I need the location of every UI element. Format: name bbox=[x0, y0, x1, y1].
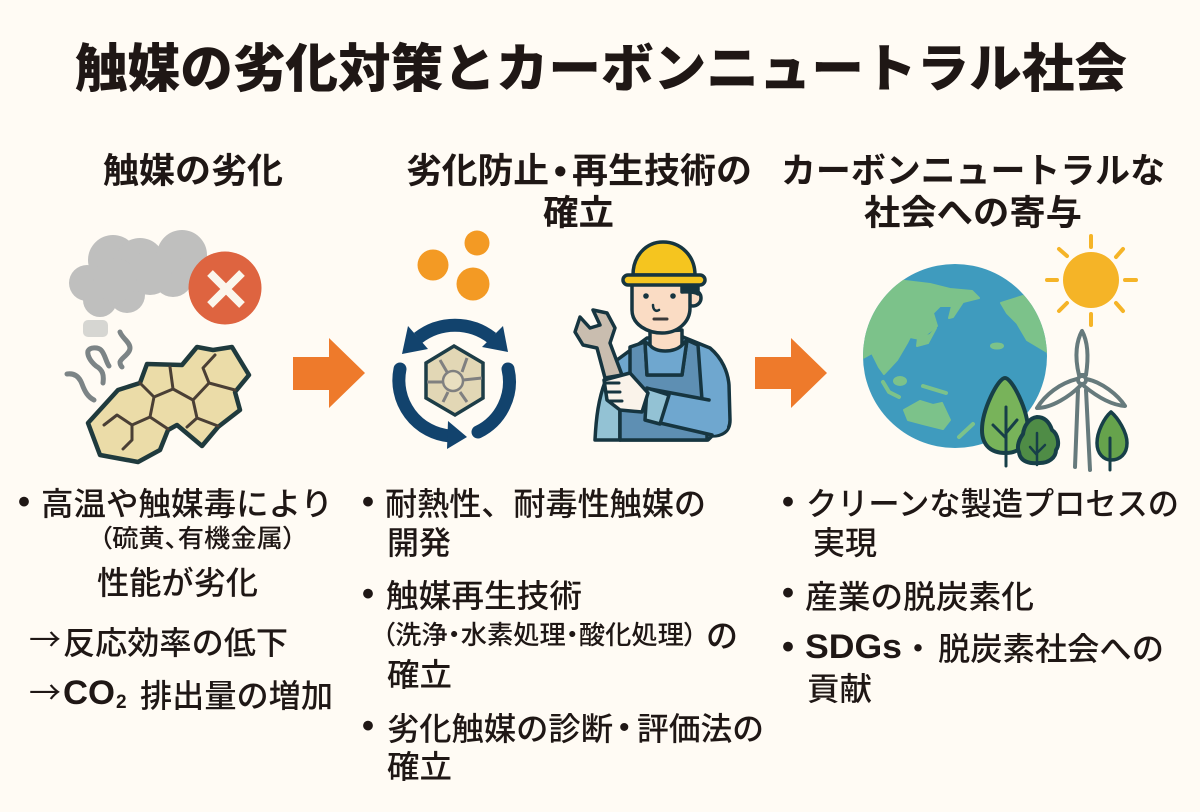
icon: globe bbox=[850, 264, 1052, 448]
icon: cracked catalyst bbox=[88, 347, 249, 462]
text block: contributions: ・ bbox=[769, 628, 807, 670]
text block: degradation causes: 排出量の増加 bbox=[140, 678, 333, 714]
heading: carbon neutral contribution: 社会への寄与 bbox=[864, 194, 1082, 233]
icon: wind turbine bbox=[1037, 331, 1125, 470]
text block: degradation causes bbox=[5, 483, 333, 714]
text block: prevention measures: の bbox=[706, 618, 738, 654]
heading: prevention and regeneration: 劣化防止 bbox=[406, 152, 549, 191]
text block: contributions: 産業の脱炭素化 bbox=[805, 579, 1034, 615]
text block: degradation causes: 高温や触媒毒により bbox=[41, 486, 333, 522]
text block: contributions bbox=[769, 483, 1179, 707]
text block: degradation causes: ・ bbox=[5, 483, 43, 525]
text block: degradation causes: CO bbox=[63, 674, 115, 712]
text block: prevention measures: 劣化触媒の診断 bbox=[387, 711, 613, 747]
text block: contributions: 脱炭素社会への bbox=[938, 631, 1164, 667]
text block: prevention measures: 触媒再生技術 bbox=[386, 578, 582, 614]
text block: prevention measures: • bbox=[619, 711, 630, 744]
icon: red cross badge bbox=[188, 252, 262, 324]
icon: worker with wrench bbox=[575, 242, 730, 440]
text block: degradation causes: 性能が劣化 bbox=[97, 565, 258, 601]
text block: prevention measures bbox=[349, 483, 764, 785]
text block: prevention measures: 評価法の bbox=[637, 711, 764, 747]
text block: contributions: 貢献 bbox=[807, 671, 872, 707]
arrow: first to second bbox=[293, 338, 365, 408]
heading: prevention and regeneration: 確立 bbox=[543, 194, 614, 233]
text block: contributions: クリーンな製造プロセスの bbox=[806, 486, 1179, 522]
text block: degradation causes: → bbox=[29, 668, 61, 714]
heading: prevention and regeneration bbox=[406, 150, 752, 233]
text block: prevention measures: ・ bbox=[349, 575, 387, 617]
icon: sun bbox=[1047, 236, 1136, 325]
icon: trees bbox=[982, 378, 1127, 470]
text block: contributions: ・ bbox=[769, 483, 807, 525]
text block: contributions: SDGs bbox=[805, 628, 902, 666]
heading: carbon neutral contribution: カーボンニュートラルな bbox=[781, 152, 1165, 191]
text block: prevention measures: 耐熱性、耐毒性触媒の bbox=[385, 486, 706, 522]
heading: catalyst degradation: 触媒の劣化 bbox=[103, 152, 283, 191]
title: 触媒の劣化対策とカーボンニュートラル社会 bbox=[75, 41, 1127, 99]
arrow: second to third bbox=[755, 338, 827, 408]
panel: prevention and regeneration bbox=[349, 150, 764, 785]
panel: catalyst degradation bbox=[5, 152, 333, 714]
text block: contributions: 実現 bbox=[813, 525, 877, 561]
heading: prevention and regeneration: • bbox=[554, 150, 567, 191]
text block: degradation causes: → bbox=[29, 615, 61, 661]
text block: contributions: ・ bbox=[902, 631, 934, 667]
text block: prevention measures: ・ bbox=[349, 707, 387, 749]
text block: prevention measures: 開発 bbox=[387, 525, 451, 561]
text block: prevention measures: ・ bbox=[349, 483, 387, 525]
icon: fumes bbox=[67, 332, 130, 400]
heading: prevention and regeneration: 再生技術の bbox=[572, 152, 752, 191]
text block: prevention measures: （洗浄・水素処理・酸化処理） bbox=[382, 620, 697, 650]
panel: carbon neutral contribution bbox=[769, 152, 1179, 707]
text block: degradation causes: 反応効率の低下 bbox=[63, 625, 288, 661]
icon: regeneration cycle bbox=[399, 325, 509, 449]
heading: carbon neutral contribution bbox=[781, 152, 1165, 233]
text block: prevention measures: 確立 bbox=[387, 657, 452, 693]
icon: smoke cloud bbox=[69, 230, 207, 337]
text block: prevention measures: 確立 bbox=[387, 749, 452, 785]
text block: degradation causes: （硫黄、有機金属） bbox=[99, 525, 296, 553]
icon: orange particles bbox=[418, 230, 490, 300]
text block: degradation causes: 2 bbox=[116, 692, 127, 713]
text block: contributions: ・ bbox=[769, 574, 807, 616]
